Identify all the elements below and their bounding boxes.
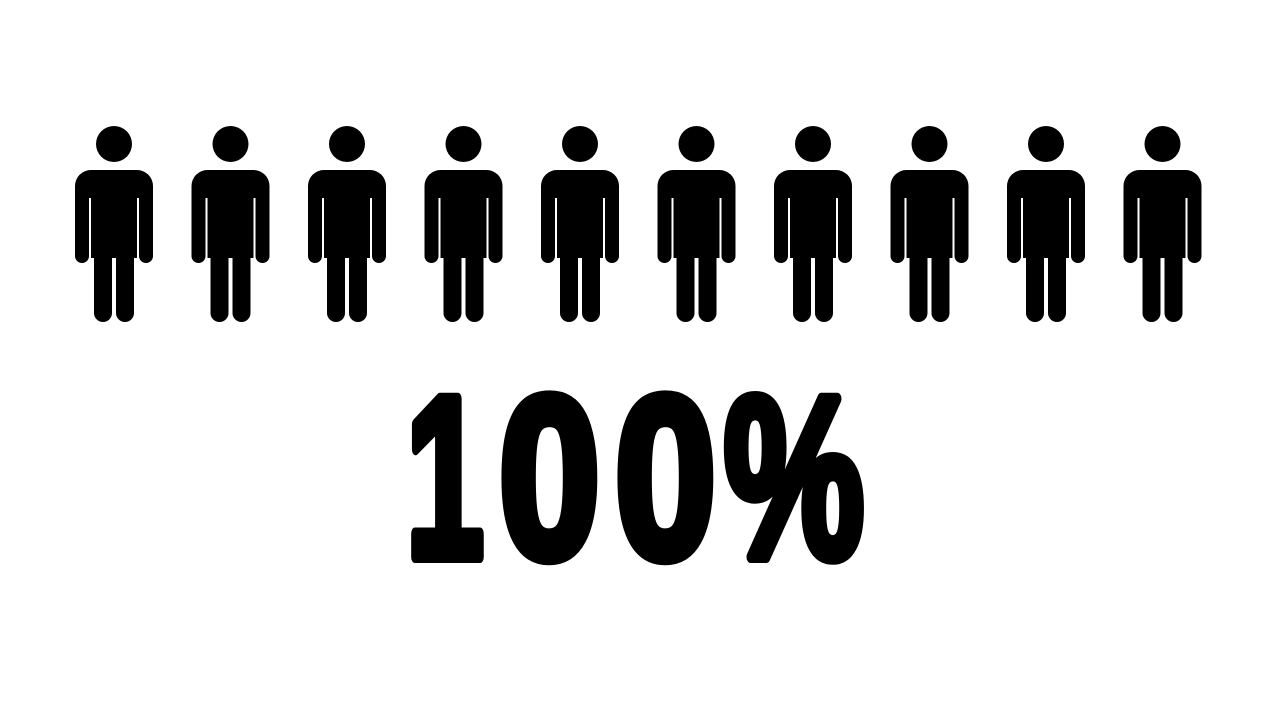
icon: person 10 [1124, 126, 1202, 322]
icon: person 6 [658, 126, 736, 322]
icon: person 7 [774, 126, 852, 322]
percentage label: % [724, 349, 864, 606]
icon: person 4 [424, 126, 502, 322]
percentage label: 0 [499, 349, 600, 606]
percentage label: 0 [615, 349, 716, 606]
icon: person 9 [1007, 126, 1085, 322]
icon: person 8 [890, 126, 968, 322]
people row [75, 126, 1202, 322]
icon: person 2 [192, 126, 270, 322]
icon: person 5 [541, 126, 619, 322]
percentage label: 1 [406, 349, 484, 606]
percentage label [406, 349, 864, 606]
icon: person 3 [308, 126, 386, 322]
icon: person 1 [75, 126, 153, 322]
